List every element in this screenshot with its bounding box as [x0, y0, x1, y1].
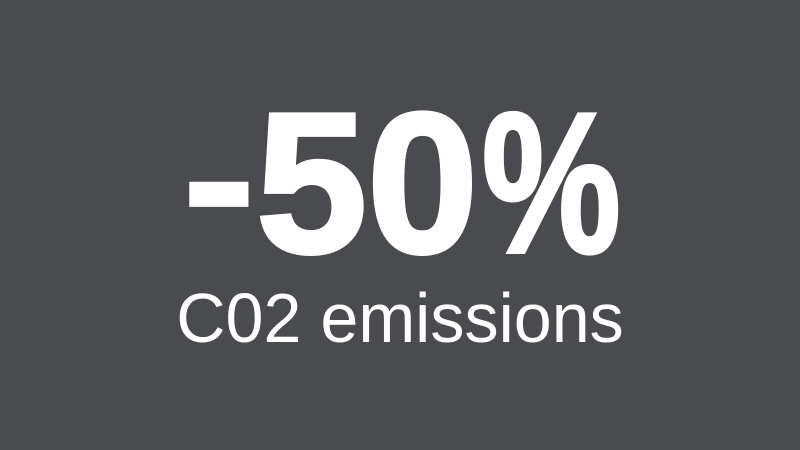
- headline figure: -: [183, 79, 255, 280]
- headline figure: 5: [256, 72, 367, 295]
- headline figure: [183, 72, 621, 295]
- headline figure: 0: [367, 72, 478, 295]
- caption: C02 emissions: [176, 278, 624, 357]
- headline figure: %: [482, 72, 621, 295]
